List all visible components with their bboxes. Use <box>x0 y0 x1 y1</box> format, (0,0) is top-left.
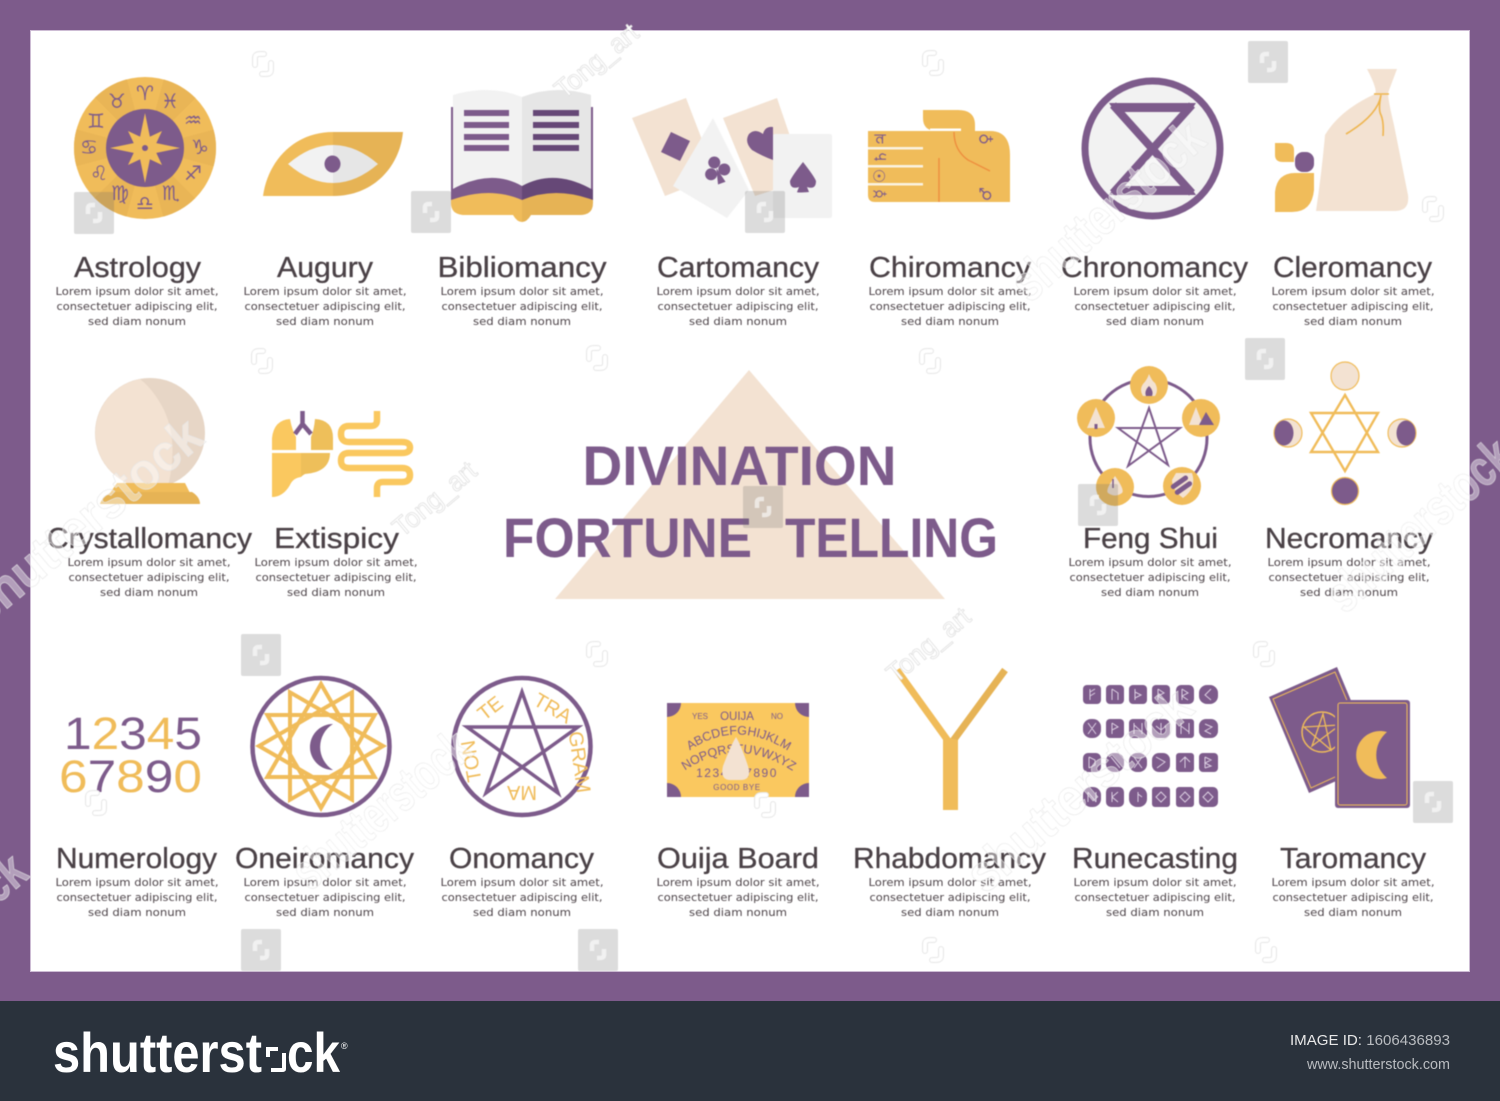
heading: Extispicy <box>274 523 400 555</box>
heading: Astrology <box>74 252 202 284</box>
central triangle and title <box>503 370 998 599</box>
text block: sed diam nonum <box>473 316 571 328</box>
panel: Necromancy <box>1265 362 1434 599</box>
icon: zodiac wheel: ♒ <box>184 108 202 132</box>
text block: Lorem ipsum dolor sit amet, <box>244 877 406 889</box>
icon: ouija board: GOOD BYE <box>713 783 761 792</box>
text block: sed diam nonum <box>1304 907 1402 919</box>
text block: consectetuer adipiscing elit, <box>658 301 818 313</box>
text block <box>56 286 218 328</box>
panel: Extispicy <box>254 411 418 599</box>
panel: Numerology <box>56 708 218 919</box>
heading: Cleromancy <box>1273 252 1433 284</box>
icon: zodiac wheel: ♎ <box>136 191 154 215</box>
text block: consectetuer adipiscing elit, <box>56 892 218 904</box>
panel: Augury <box>244 132 406 328</box>
text block: sed diam nonum <box>1106 316 1204 328</box>
text block <box>1074 877 1236 919</box>
panel: Ouija Board <box>656 702 820 919</box>
footer bar <box>0 1001 1500 1101</box>
heading: Chronomancy <box>1061 252 1249 284</box>
icon: zodiac wheel: ♉ <box>108 89 126 113</box>
text block: sed diam nonum <box>689 907 787 919</box>
text block: consectetuer adipiscing elit, <box>870 892 1030 904</box>
icon: bird eye <box>263 132 403 196</box>
text block: sed diam nonum <box>276 907 374 919</box>
text block: consectetuer adipiscing elit, <box>1268 572 1430 584</box>
text block <box>1068 557 1232 599</box>
panel: Cleromancy <box>1272 69 1434 328</box>
heading: Ouija Board <box>657 843 819 875</box>
icon: tetragrammaton pentagram: GRAM <box>564 730 594 794</box>
text block: consectetuer adipiscing elit, <box>56 301 218 313</box>
site url: www.shutterstock.com <box>1306 1057 1450 1073</box>
panel: Runecasting <box>1072 685 1238 919</box>
icon: hourglass circle <box>1085 81 1220 216</box>
text block <box>254 557 418 599</box>
text block <box>68 557 230 599</box>
icon: tetragrammaton pentagram <box>454 678 594 815</box>
watermark overlay: shutterstock <box>280 719 482 901</box>
title line 2 <box>503 506 998 569</box>
panel: Bibliomancy <box>438 90 607 328</box>
icon: tetragrammaton pentagram: TON <box>458 738 486 784</box>
text block: consectetuer adipiscing elit, <box>1272 301 1434 313</box>
text block: sed diam nonum <box>1101 587 1199 599</box>
text block: sed diam nonum <box>689 316 787 328</box>
heading: Taromancy <box>1280 843 1427 875</box>
icon: ouija board: NO <box>771 712 783 721</box>
icon: playing cards <box>632 98 832 218</box>
panel: Crystallomancy <box>47 378 253 599</box>
image id: IMAGE ID: 1606436893 <box>1290 1032 1450 1049</box>
icon: palm hand: ♃ <box>871 132 890 146</box>
text block: sed diam nonum <box>1304 316 1402 328</box>
heading: Bibliomancy <box>438 252 607 284</box>
text block: consectetuer adipiscing elit, <box>1074 301 1236 313</box>
watermark overlay: shutterstock <box>955 677 1204 904</box>
heading: Crystallomancy <box>47 523 253 555</box>
text block: Lorem ipsum dolor sit amet, <box>656 877 820 889</box>
shutterstock logo: shutterst <box>53 1021 262 1084</box>
icon: ouija board: OUIJA <box>720 711 754 723</box>
icon: palm hand: ♂ <box>976 187 995 201</box>
text block <box>1272 286 1434 328</box>
panel: Cartomancy <box>632 98 832 328</box>
text block: Lorem ipsum dolor sit amet, <box>1272 877 1434 889</box>
panel: Rhabdomancy <box>853 670 1047 919</box>
icon: organs <box>272 411 410 497</box>
icon: zodiac wheel: ♌ <box>90 161 108 185</box>
icon: tetragrammaton pentagram: TE <box>474 692 507 725</box>
watermark overlay: Tong_art <box>549 17 645 105</box>
title line 2: FORTUNE <box>503 506 752 569</box>
title line 1: DIVINATION <box>582 434 896 497</box>
icon: zodiac wheel: ♋ <box>80 135 98 159</box>
triangle <box>555 370 945 599</box>
icon: ouija board: NOPQRSTUVWXYZ <box>680 744 797 772</box>
text block: sed diam nonum <box>88 316 186 328</box>
text block <box>440 286 604 328</box>
text block <box>244 877 406 919</box>
text block: Lorem ipsum dolor sit amet, <box>68 557 230 569</box>
text block: sed diam nonum <box>473 907 571 919</box>
icon: zodiac wheel: ♑ <box>191 135 209 159</box>
text block: Lorem ipsum dolor sit amet, <box>56 877 218 889</box>
text block: Lorem ipsum dolor sit amet, <box>656 286 820 298</box>
heading: Necromancy <box>1265 523 1434 555</box>
icon: tetragrammaton pentagram: MA <box>506 781 537 803</box>
watermark overlay: shutterstock <box>999 109 1216 313</box>
heading: Augury <box>277 252 374 284</box>
text block <box>868 877 1032 919</box>
text block: Lorem ipsum dolor sit amet, <box>254 557 418 569</box>
icon: numbers: 12345 <box>64 708 202 759</box>
text block: consectetuer adipiscing elit, <box>1070 572 1230 584</box>
heading: Rhabdomancy <box>853 843 1047 875</box>
text block: sed diam nonum <box>276 316 374 328</box>
heading: Onomancy <box>449 843 595 875</box>
heading: Oneiromancy <box>235 843 415 875</box>
text block: sed diam nonum <box>100 587 198 599</box>
heading: Numerology <box>56 843 218 875</box>
title line 2: TELLING <box>785 506 998 569</box>
text block: sed diam nonum <box>901 907 999 919</box>
text block: consectetuer adipiscing elit, <box>658 892 818 904</box>
icon: zodiac wheel: ♈ <box>136 81 154 105</box>
icon: zodiac wheel: ♐ <box>184 161 202 185</box>
panel: Astrology <box>56 77 218 328</box>
icon: open book <box>451 90 593 222</box>
text block <box>1074 286 1236 328</box>
text block: consectetuer adipiscing elit, <box>442 301 602 313</box>
text block: consectetuer adipiscing elit, <box>870 301 1030 313</box>
icon: zodiac wheel: ♏ <box>162 181 180 205</box>
text block: Lorem ipsum dolor sit amet, <box>868 286 1032 298</box>
icon: palm hand: ☉ <box>870 169 889 183</box>
text block: Lorem ipsum dolor sit amet, <box>868 877 1032 889</box>
text block <box>1272 877 1434 919</box>
icon: numbers: 67890 <box>59 751 202 802</box>
text block: consectetuer adipiscing elit, <box>244 301 406 313</box>
icon: crystal ball <box>95 378 205 504</box>
text block: Lorem ipsum dolor sit amet, <box>56 286 218 298</box>
text block: consectetuer adipiscing elit, <box>442 892 602 904</box>
icon: ouija board: ABCDEFGHIJKLM <box>688 725 792 751</box>
icon: palm hand <box>868 110 1010 202</box>
icon: ouija board: 1234567890 <box>696 766 778 780</box>
icon: palm hand: ☿ <box>870 189 889 199</box>
icon: moon and star seal <box>252 678 390 815</box>
text block: Lorem ipsum dolor sit amet, <box>1074 877 1236 889</box>
text block: consectetuer adipiscing elit, <box>68 572 230 584</box>
text block: Lorem ipsum dolor sit amet, <box>440 877 604 889</box>
icon: zodiac wheel <box>74 77 216 219</box>
text block: Lorem ipsum dolor sit amet, <box>1074 286 1236 298</box>
icon: bag of lots <box>1275 69 1408 212</box>
text block <box>244 286 406 328</box>
icon: palm hand: ♄ <box>871 150 890 164</box>
text block: Lorem ipsum dolor sit amet, <box>244 286 406 298</box>
text block: Lorem ipsum dolor sit amet, <box>1268 557 1430 569</box>
panel: Taromancy <box>1269 667 1434 919</box>
icon: ouija board: YES <box>692 712 708 721</box>
text block: Lorem ipsum dolor sit amet, <box>1068 557 1232 569</box>
text block: consectetuer adipiscing elit, <box>244 892 406 904</box>
icon: zodiac wheel: ♓ <box>161 89 179 113</box>
heading: Feng Shui <box>1083 523 1218 555</box>
heading: Runecasting <box>1072 843 1238 875</box>
icon: numbers <box>59 708 202 802</box>
icon: star and moon phases <box>1274 362 1416 504</box>
text block <box>1268 557 1430 599</box>
text block: Lorem ipsum dolor sit amet, <box>1272 286 1434 298</box>
text block <box>656 877 820 919</box>
text block: sed diam nonum <box>901 316 999 328</box>
text block: sed diam nonum <box>88 907 186 919</box>
text block: consectetuer adipiscing elit, <box>256 572 416 584</box>
panel: Feng Shui <box>1068 366 1232 599</box>
text block: consectetuer adipiscing elit, <box>1074 892 1236 904</box>
watermark overlay: Tong_art <box>881 601 977 689</box>
text block: consectetuer adipiscing elit, <box>1272 892 1434 904</box>
icon: zodiac wheel: ♊ <box>87 109 105 133</box>
panel: Onomancy <box>440 678 604 919</box>
icon: dowsing rod <box>897 670 1005 810</box>
panel: Chronomancy <box>1061 81 1249 328</box>
panel: Chiromancy <box>868 110 1032 328</box>
shutterstock logo: ck <box>287 1021 341 1084</box>
text block: sed diam nonum <box>287 587 385 599</box>
shutterstock logo: ® <box>341 1041 348 1051</box>
icon: five elements <box>1077 366 1220 506</box>
heading: Cartomancy <box>657 252 820 284</box>
text block <box>656 286 820 328</box>
text block <box>56 877 218 919</box>
icon: palm hand: ♀ <box>976 133 995 145</box>
panel: Oneiromancy <box>235 678 415 919</box>
icon: tarot cards <box>1269 667 1410 808</box>
text block: Lorem ipsum dolor sit amet, <box>440 286 604 298</box>
icon: ouija board <box>666 702 810 798</box>
text block <box>440 877 604 919</box>
text block: sed diam nonum <box>1300 587 1398 599</box>
watermark overlay: Tong_art <box>387 455 483 543</box>
icon: tetragrammaton pentagram: TRA <box>530 689 576 729</box>
text block: sed diam nonum <box>1106 907 1204 919</box>
icon: zodiac wheel: ♍ <box>111 181 129 205</box>
text block <box>868 286 1032 328</box>
icon: rune stones <box>1083 685 1218 807</box>
heading: Chiromancy <box>869 252 1032 284</box>
